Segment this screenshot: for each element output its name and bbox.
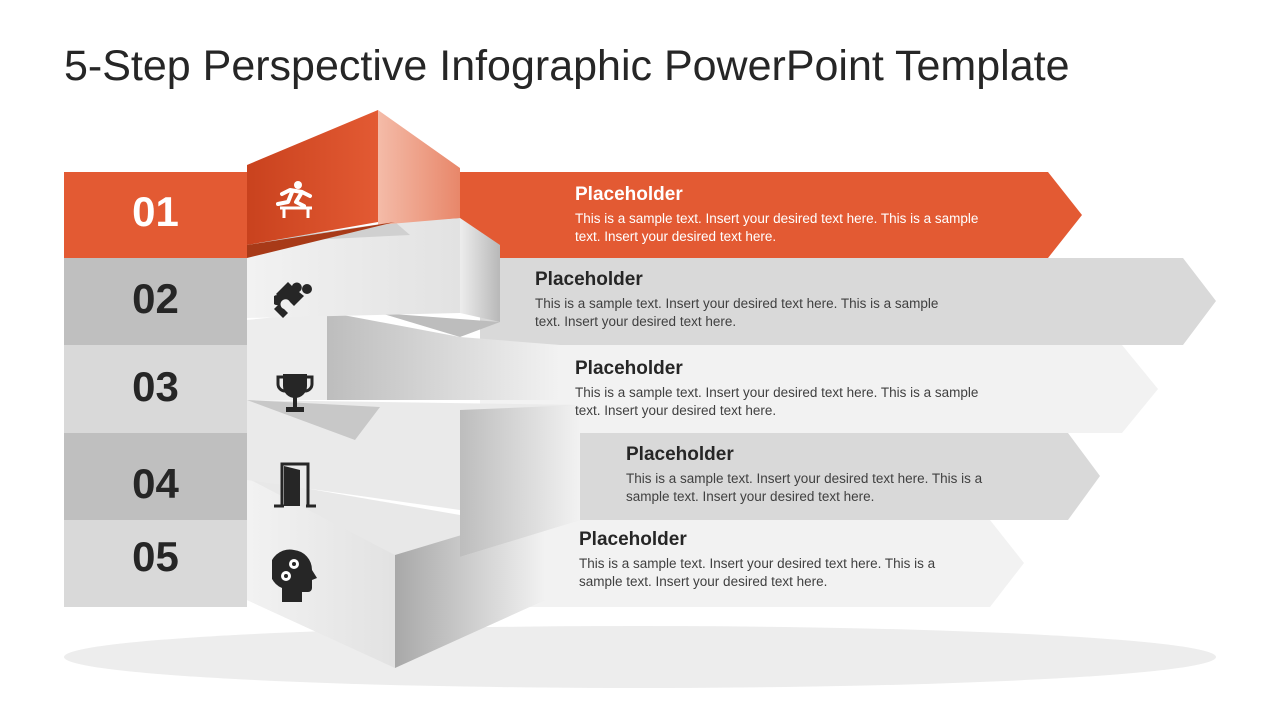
arrow 1 xyxy=(440,172,1082,258)
arrow 3 xyxy=(480,345,1158,433)
number 03: 03 xyxy=(132,363,179,410)
text 5 xyxy=(579,529,936,589)
text 1: text. Insert your desired text here. xyxy=(575,229,776,244)
block 3 xyxy=(247,312,560,400)
arrow 2 xyxy=(480,258,1216,345)
shadow ellipse xyxy=(64,626,1216,688)
text 2 xyxy=(535,269,938,329)
icon: door xyxy=(274,462,316,508)
title: 5-Step Perspective Infographic PowerPoint Template xyxy=(64,42,1069,90)
block 5 xyxy=(247,478,545,668)
number 05: 05 xyxy=(132,533,179,580)
text 4: This is a sample text. Insert your desired text here. This is a xyxy=(626,471,982,486)
number 04: 04 xyxy=(132,460,179,507)
text 2: This is a sample text. Insert your desired text here. This is a sample xyxy=(535,296,938,311)
block 1 xyxy=(247,110,460,258)
number 01: 01 xyxy=(132,188,179,235)
row bands xyxy=(64,172,247,607)
icon: head with gears xyxy=(272,550,317,602)
text 2: text. Insert your desired text here. xyxy=(535,314,736,329)
text 1: This is a sample text. Insert your desired text here. This is a sample xyxy=(575,211,978,226)
text 3 xyxy=(575,358,978,418)
number 02: 02 xyxy=(132,275,179,322)
text 3: This is a sample text. Insert your desired text here. This is a sample xyxy=(575,385,978,400)
arrow 5 xyxy=(520,520,1024,607)
icon: puzzle xyxy=(274,282,312,318)
arrow 4 xyxy=(560,433,1100,520)
icon: hurdle runner xyxy=(276,181,312,218)
text 2: Placeholder xyxy=(535,269,643,290)
text 3: text. Insert your desired text here. xyxy=(575,403,776,418)
text 3: Placeholder xyxy=(575,358,683,379)
text 1 xyxy=(575,184,978,244)
block 4 xyxy=(247,400,580,557)
text 5: This is a sample text. Insert your desired text here. This is a xyxy=(579,556,935,571)
text 4: Placeholder xyxy=(626,444,734,465)
block 2 xyxy=(247,218,500,322)
text 4: sample text. Insert your desired text here. xyxy=(626,489,874,504)
text 5: Placeholder xyxy=(579,529,687,550)
icon: trophy xyxy=(276,374,314,412)
text 5: sample text. Insert your desired text here. xyxy=(579,574,827,589)
text 4 xyxy=(626,444,982,504)
text 1: Placeholder xyxy=(575,184,683,205)
